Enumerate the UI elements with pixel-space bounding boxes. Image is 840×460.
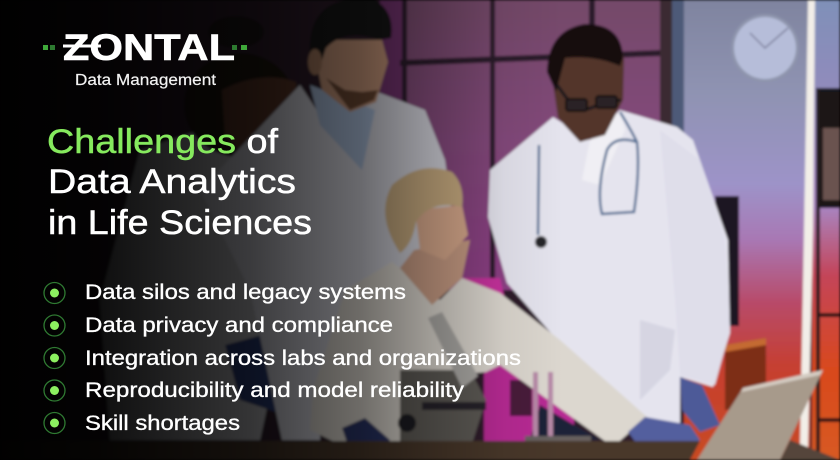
window wall (380, 0, 686, 460)
person: left woman (100, 16, 300, 440)
table (0, 441, 700, 460)
logo wordmark: ZONTAL (63, 26, 235, 68)
person: seated woman (310, 168, 700, 452)
item 5: Skill shortages (85, 411, 240, 435)
person: standing doctor (488, 24, 730, 432)
stethoscope (538, 112, 638, 235)
logo bar through Z (63, 44, 101, 48)
magenta surfaces (462, 278, 600, 443)
light strip (800, 0, 815, 450)
logo tagline: Data Management (75, 72, 217, 89)
title line 3: in Life Sciences (48, 204, 312, 242)
item 4: Reproducibility and model reliability (85, 378, 464, 402)
test tubes (525, 372, 591, 441)
gloved hands (342, 418, 390, 452)
challenge list (44, 280, 521, 435)
orange side table (725, 338, 766, 410)
item 3: Integration across labs and organizations (85, 346, 521, 370)
title line 2: Data Analytics (48, 163, 296, 201)
laptop (697, 370, 840, 460)
logo (43, 26, 247, 89)
wall clock (731, 14, 799, 82)
monitor (715, 196, 739, 326)
gloved hand of left woman (225, 330, 300, 420)
right shelves (812, 0, 840, 460)
microscope (400, 370, 486, 450)
pillar wall (684, 0, 810, 460)
item 2: Data privacy and compliance (85, 313, 393, 337)
logo accent squares (43, 45, 247, 50)
item 1: Data silos and legacy systems (85, 280, 406, 304)
title (47, 123, 312, 242)
person: middle man (200, 0, 460, 440)
title line 1: Challenges of (47, 123, 278, 161)
gloved hand (680, 377, 720, 432)
